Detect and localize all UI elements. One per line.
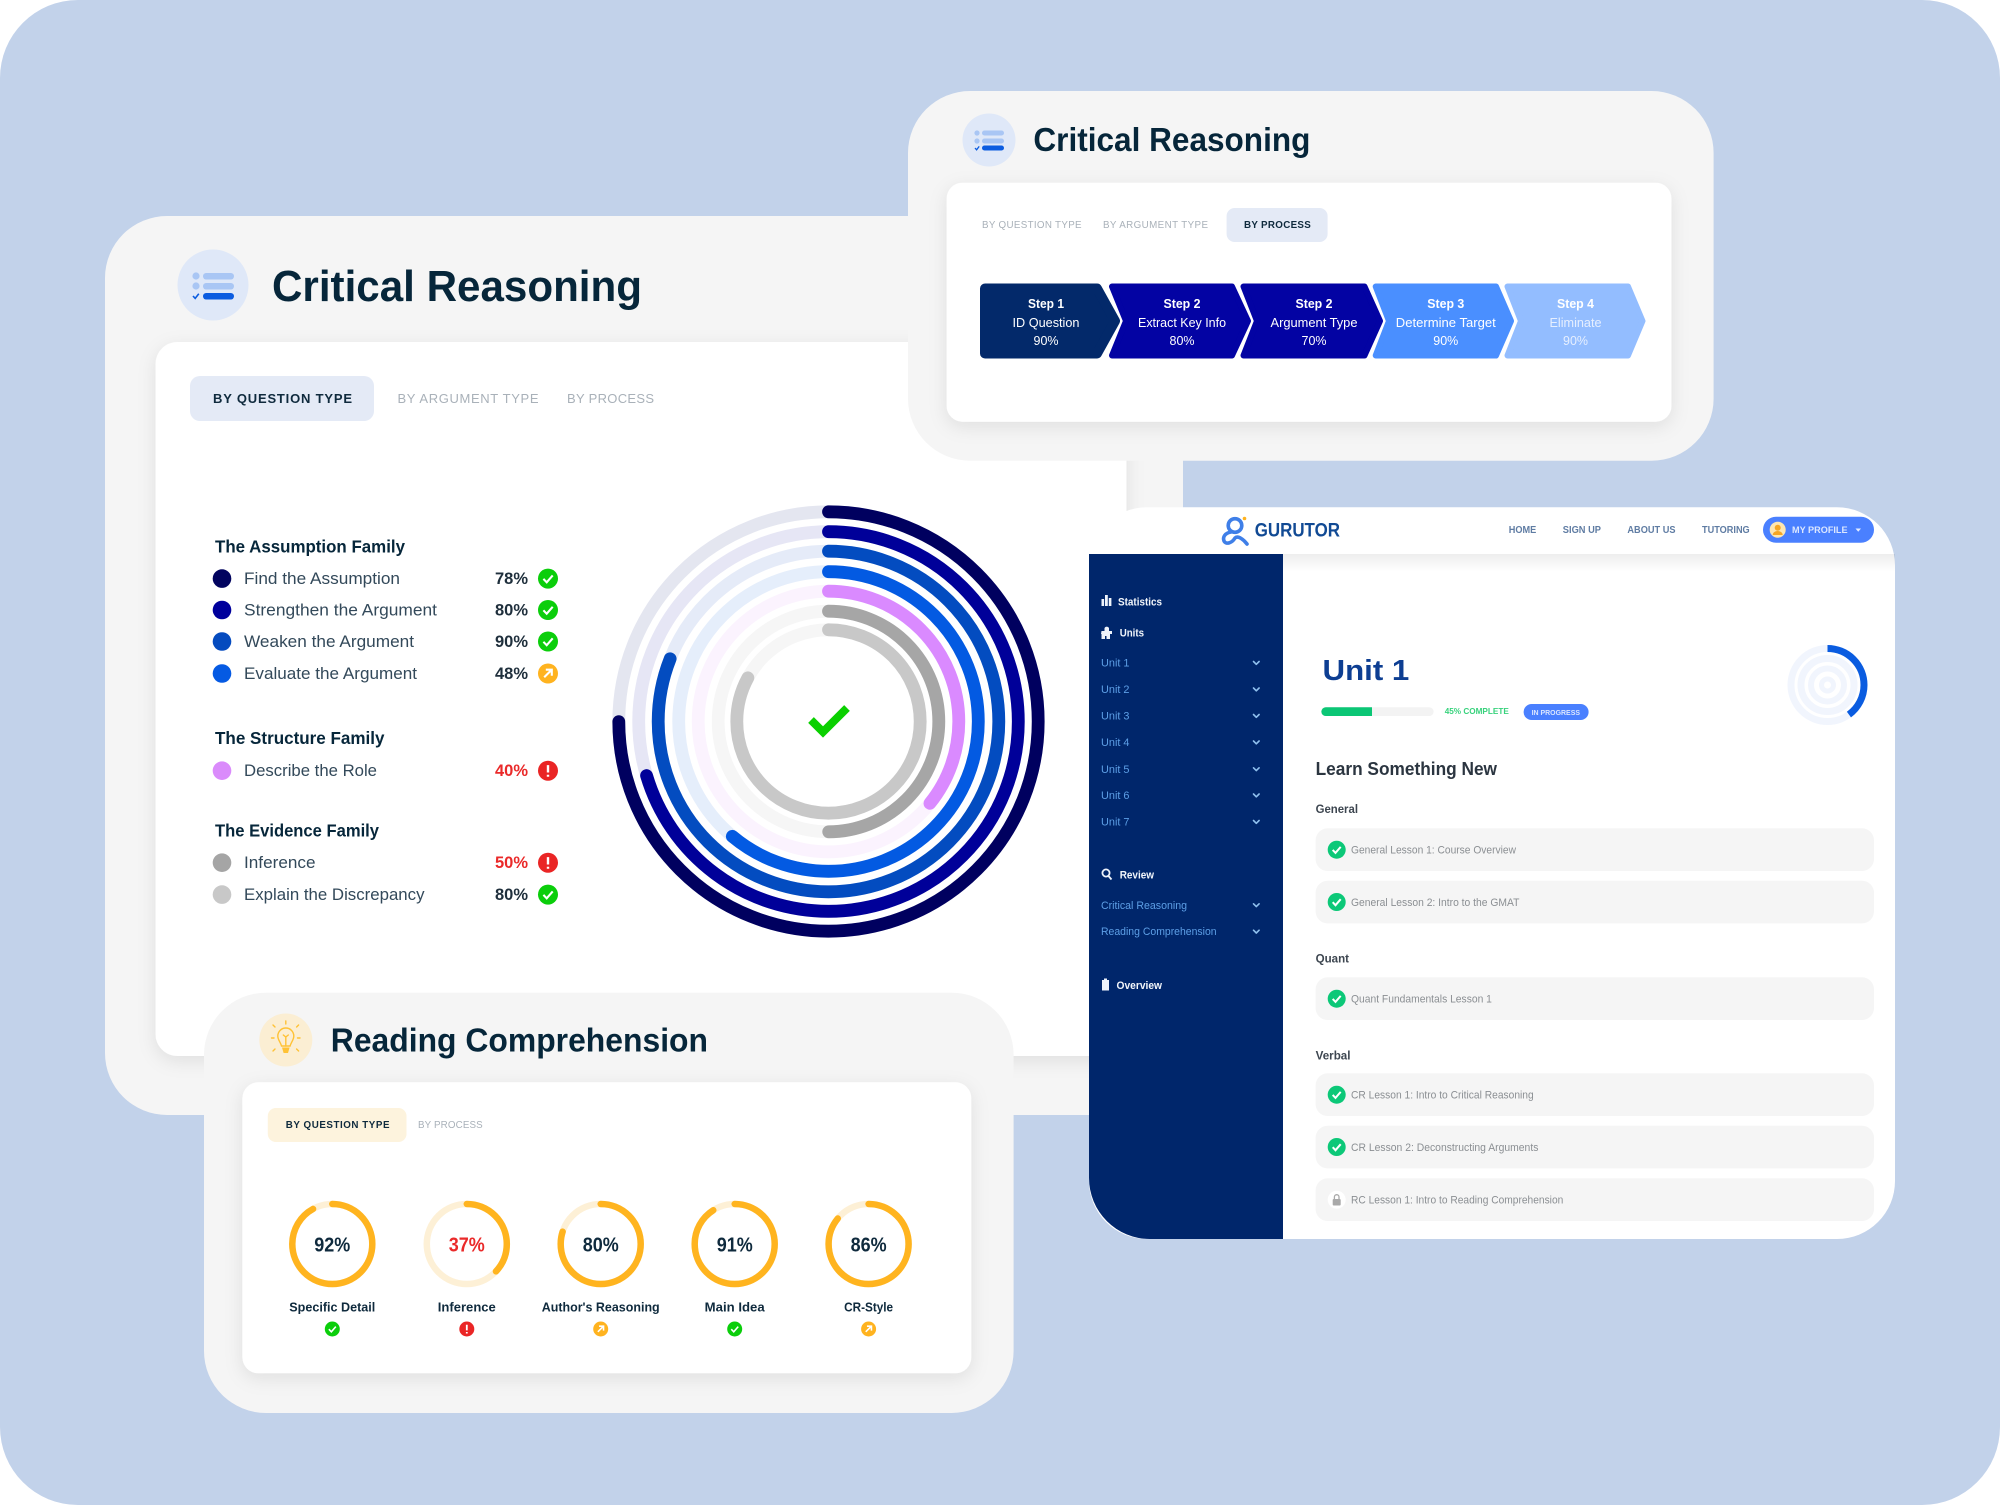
lesson row: cr 2 <box>1316 1126 1874 1168</box>
step 2 chevron: 80% <box>1170 334 1194 348</box>
lesson row: general 2: General Lesson 2: Intro to the GMAT <box>1351 897 1520 909</box>
step 2 argument type chevron <box>1244 286 1380 356</box>
step 1 chevron: Step 1 <box>1028 297 1064 311</box>
legend: the assumption family: 90% <box>495 633 528 651</box>
section: general: General <box>1316 802 1358 816</box>
tab: by question type: BY QUESTION TYPE <box>982 220 1082 231</box>
logo: gurutor <box>1224 517 1340 544</box>
icon: bar chart <box>1102 595 1111 606</box>
section: quant <box>1316 952 1874 1020</box>
sidebar: unit list <box>1101 658 1259 828</box>
sidebar: review list <box>1101 900 1259 938</box>
sidebar: statistics: Statistics <box>1118 596 1162 608</box>
tab: by process active: BY PROCESS <box>1244 220 1311 231</box>
chart: concentric radial progress <box>619 512 1038 931</box>
section: verbal: Verbal <box>1316 1048 1350 1062</box>
tab: by argument type: BY ARGUMENT TYPE <box>398 391 539 406</box>
legend: the assumption family: The Assumption Family <box>215 536 405 556</box>
step 4 chevron <box>1508 286 1642 356</box>
legend: the structure family: Describe the Role <box>244 762 377 780</box>
title: reading comprehension: Reading Comprehension <box>331 1022 708 1059</box>
icon: search <box>1102 869 1112 880</box>
gauge: main idea: 91% <box>717 1234 753 1256</box>
gauge: main idea: Main Idea <box>705 1300 765 1315</box>
step 2 argument type chevron: Argument Type <box>1270 316 1358 330</box>
title: critical reasoning: Critical Reasoning <box>272 262 642 311</box>
tab: by question type active <box>268 1108 406 1142</box>
card: process steps <box>947 183 1672 422</box>
nav: sign up: SIGN UP <box>1563 525 1601 536</box>
progress bar <box>1321 707 1434 716</box>
gauge: main idea <box>695 1204 775 1336</box>
lesson row: general 2 <box>1316 881 1874 923</box>
legend: the evidence family: Inference <box>244 854 316 872</box>
legend: the assumption family: Weaken the Argument <box>244 633 414 651</box>
sidebar: unit list: Unit 1 <box>1101 658 1130 670</box>
gauge: specific detail <box>289 1204 375 1336</box>
legend: the structure family: 40% <box>495 762 528 780</box>
panel: critical reasoning by process <box>908 91 1714 461</box>
badge: in progress: IN PROGRESS <box>1532 708 1580 717</box>
step 4 chevron: Eliminate <box>1550 316 1602 330</box>
nav: about us: ABOUT US <box>1627 525 1676 536</box>
step 2 chevron: Extract Key Info <box>1138 316 1226 330</box>
lesson row: general 1: General Lesson 1: Course Overview <box>1351 844 1516 856</box>
section: quant: Quant <box>1316 952 1349 966</box>
panel: reading comprehension <box>204 993 1014 1413</box>
legend: the assumption family: Evaluate the Argument <box>244 665 417 683</box>
icon: light bulb <box>259 1014 312 1066</box>
icon: puzzle <box>1101 627 1112 639</box>
lesson row: cr 1: CR Lesson 1: Intro to Critical Reasoning <box>1351 1090 1534 1102</box>
sidebar: unit list: Unit 2 <box>1101 684 1130 696</box>
gauge: specific detail: 92% <box>314 1234 350 1256</box>
sidebar: overview: Overview <box>1116 980 1162 992</box>
gauge: inference <box>427 1204 507 1336</box>
legend: the evidence family: Explain the Discrepancy <box>244 886 425 904</box>
icon: task list large <box>178 250 248 320</box>
badge: in progress <box>1524 704 1589 720</box>
header shadow <box>1283 554 1895 572</box>
step 1 chevron <box>985 288 1115 354</box>
button: my profile: MY PROFILE <box>1792 525 1848 536</box>
chart: mini radial <box>1791 648 1864 722</box>
card: question type chart <box>156 342 1126 1056</box>
card: reading comprehension scores <box>242 1082 971 1373</box>
legend: the assumption family: Find the Assumption <box>244 570 400 588</box>
step 1 chevron: ID Question <box>1012 316 1080 330</box>
lesson row: general 1 <box>1316 828 1874 871</box>
gauge: inference: Inference <box>438 1300 496 1315</box>
section: general <box>1316 802 1874 923</box>
legend: the structure family: The Structure Family <box>215 728 385 748</box>
sidebar: unit list: Unit 3 <box>1101 710 1130 722</box>
legend: the evidence family: 50% <box>495 854 528 872</box>
legend: the structure family <box>213 728 558 781</box>
step 2 argument type chevron: Step 2 <box>1296 297 1333 311</box>
gauge: specific detail: Specific Detail <box>289 1300 375 1315</box>
sidebar: review list: Critical Reasoning <box>1101 900 1187 912</box>
step 2 argument type chevron: 70% <box>1302 334 1326 348</box>
legend: the evidence family: 80% <box>495 886 528 904</box>
lesson row: cr 1 <box>1316 1073 1874 1116</box>
lesson row: quant 1 <box>1316 977 1874 1020</box>
section: verbal <box>1316 1048 1874 1221</box>
gauge: inference: 37% <box>449 1234 485 1256</box>
tab: by process active <box>1227 208 1328 242</box>
legend: the assumption family: 78% <box>495 570 528 588</box>
nav: tutoring: TUTORING <box>1702 525 1750 536</box>
legend: the assumption family: 48% <box>495 665 528 683</box>
step 3 chevron: Determine Target <box>1396 316 1496 330</box>
tab: by question type active: BY QUESTION TYPE <box>286 1120 390 1131</box>
legend: the assumption family: Strengthen the Argument <box>244 602 437 620</box>
title: critical reasoning small: Critical Reasoning <box>1033 121 1310 158</box>
sidebar: units: Units <box>1120 628 1144 640</box>
sidebar: review list: Reading Comprehension <box>1101 926 1217 938</box>
sidebar <box>1089 554 1283 1239</box>
step 2 chevron: Step 2 <box>1164 297 1201 311</box>
gauge: author's reasoning: Author's Reasoning <box>542 1300 660 1315</box>
lesson row: quant 1: Quant Fundamentals Lesson 1 <box>1351 994 1492 1006</box>
icon: center check mark <box>811 708 847 732</box>
step 3 chevron: Step 3 <box>1427 297 1464 311</box>
heading: unit 1: Unit 1 <box>1322 655 1409 687</box>
tab: by question type active <box>190 376 374 421</box>
step 4 chevron: Step 4 <box>1557 297 1594 311</box>
sidebar: review: Review <box>1120 870 1154 882</box>
gauge: cr-style <box>829 1204 909 1336</box>
legend: the assumption family: 80% <box>495 602 528 620</box>
legend: the evidence family: The Evidence Family <box>215 820 379 840</box>
legend: the evidence family <box>213 820 558 905</box>
gauge: cr-style: 86% <box>851 1234 887 1256</box>
logo: gurutor: GURUTOR <box>1255 520 1340 542</box>
sidebar: unit list: Unit 7 <box>1101 816 1130 828</box>
button: my profile <box>1763 517 1874 543</box>
tab: by question type active: BY QUESTION TYPE <box>213 391 352 406</box>
icon: clipboard <box>1102 978 1109 990</box>
gauge: author's reasoning <box>542 1204 660 1336</box>
lesson row: cr 2: CR Lesson 2: Deconstructing Arguments <box>1351 1142 1539 1154</box>
tab: by process: BY PROCESS <box>418 1120 483 1131</box>
panel: critical reasoning by question type <box>105 216 1183 1115</box>
sidebar: unit list: Unit 4 <box>1101 737 1130 749</box>
icon: task list small <box>962 114 1016 166</box>
gauge: author's reasoning: 80% <box>583 1234 619 1256</box>
legend: the assumption family <box>213 536 558 684</box>
gauge: cr-style: CR-Style <box>844 1300 893 1315</box>
step 3 chevron: 90% <box>1433 334 1458 348</box>
heading: learn something new: Learn Something New <box>1316 759 1498 779</box>
sidebar: unit list: Unit 5 <box>1101 764 1130 776</box>
step 2 chevron <box>1112 286 1248 356</box>
lesson row: rc 1 locked: RC Lesson 1: Intro to Reading Comprehension <box>1351 1195 1563 1207</box>
step 3 chevron <box>1376 286 1511 356</box>
sidebar: unit list: Unit 6 <box>1101 790 1130 802</box>
step 1 chevron: 90% <box>1034 334 1058 348</box>
progress label: 45% COMPLETE <box>1445 706 1509 716</box>
panel: gurutor app window <box>1089 507 1895 1239</box>
tab: by argument type: BY ARGUMENT TYPE <box>1103 220 1208 231</box>
tab: by process: BY PROCESS <box>567 391 654 406</box>
nav: home: HOME <box>1509 525 1537 536</box>
step 4 chevron: 90% <box>1563 334 1588 348</box>
lesson row: rc 1 locked <box>1316 1178 1874 1221</box>
